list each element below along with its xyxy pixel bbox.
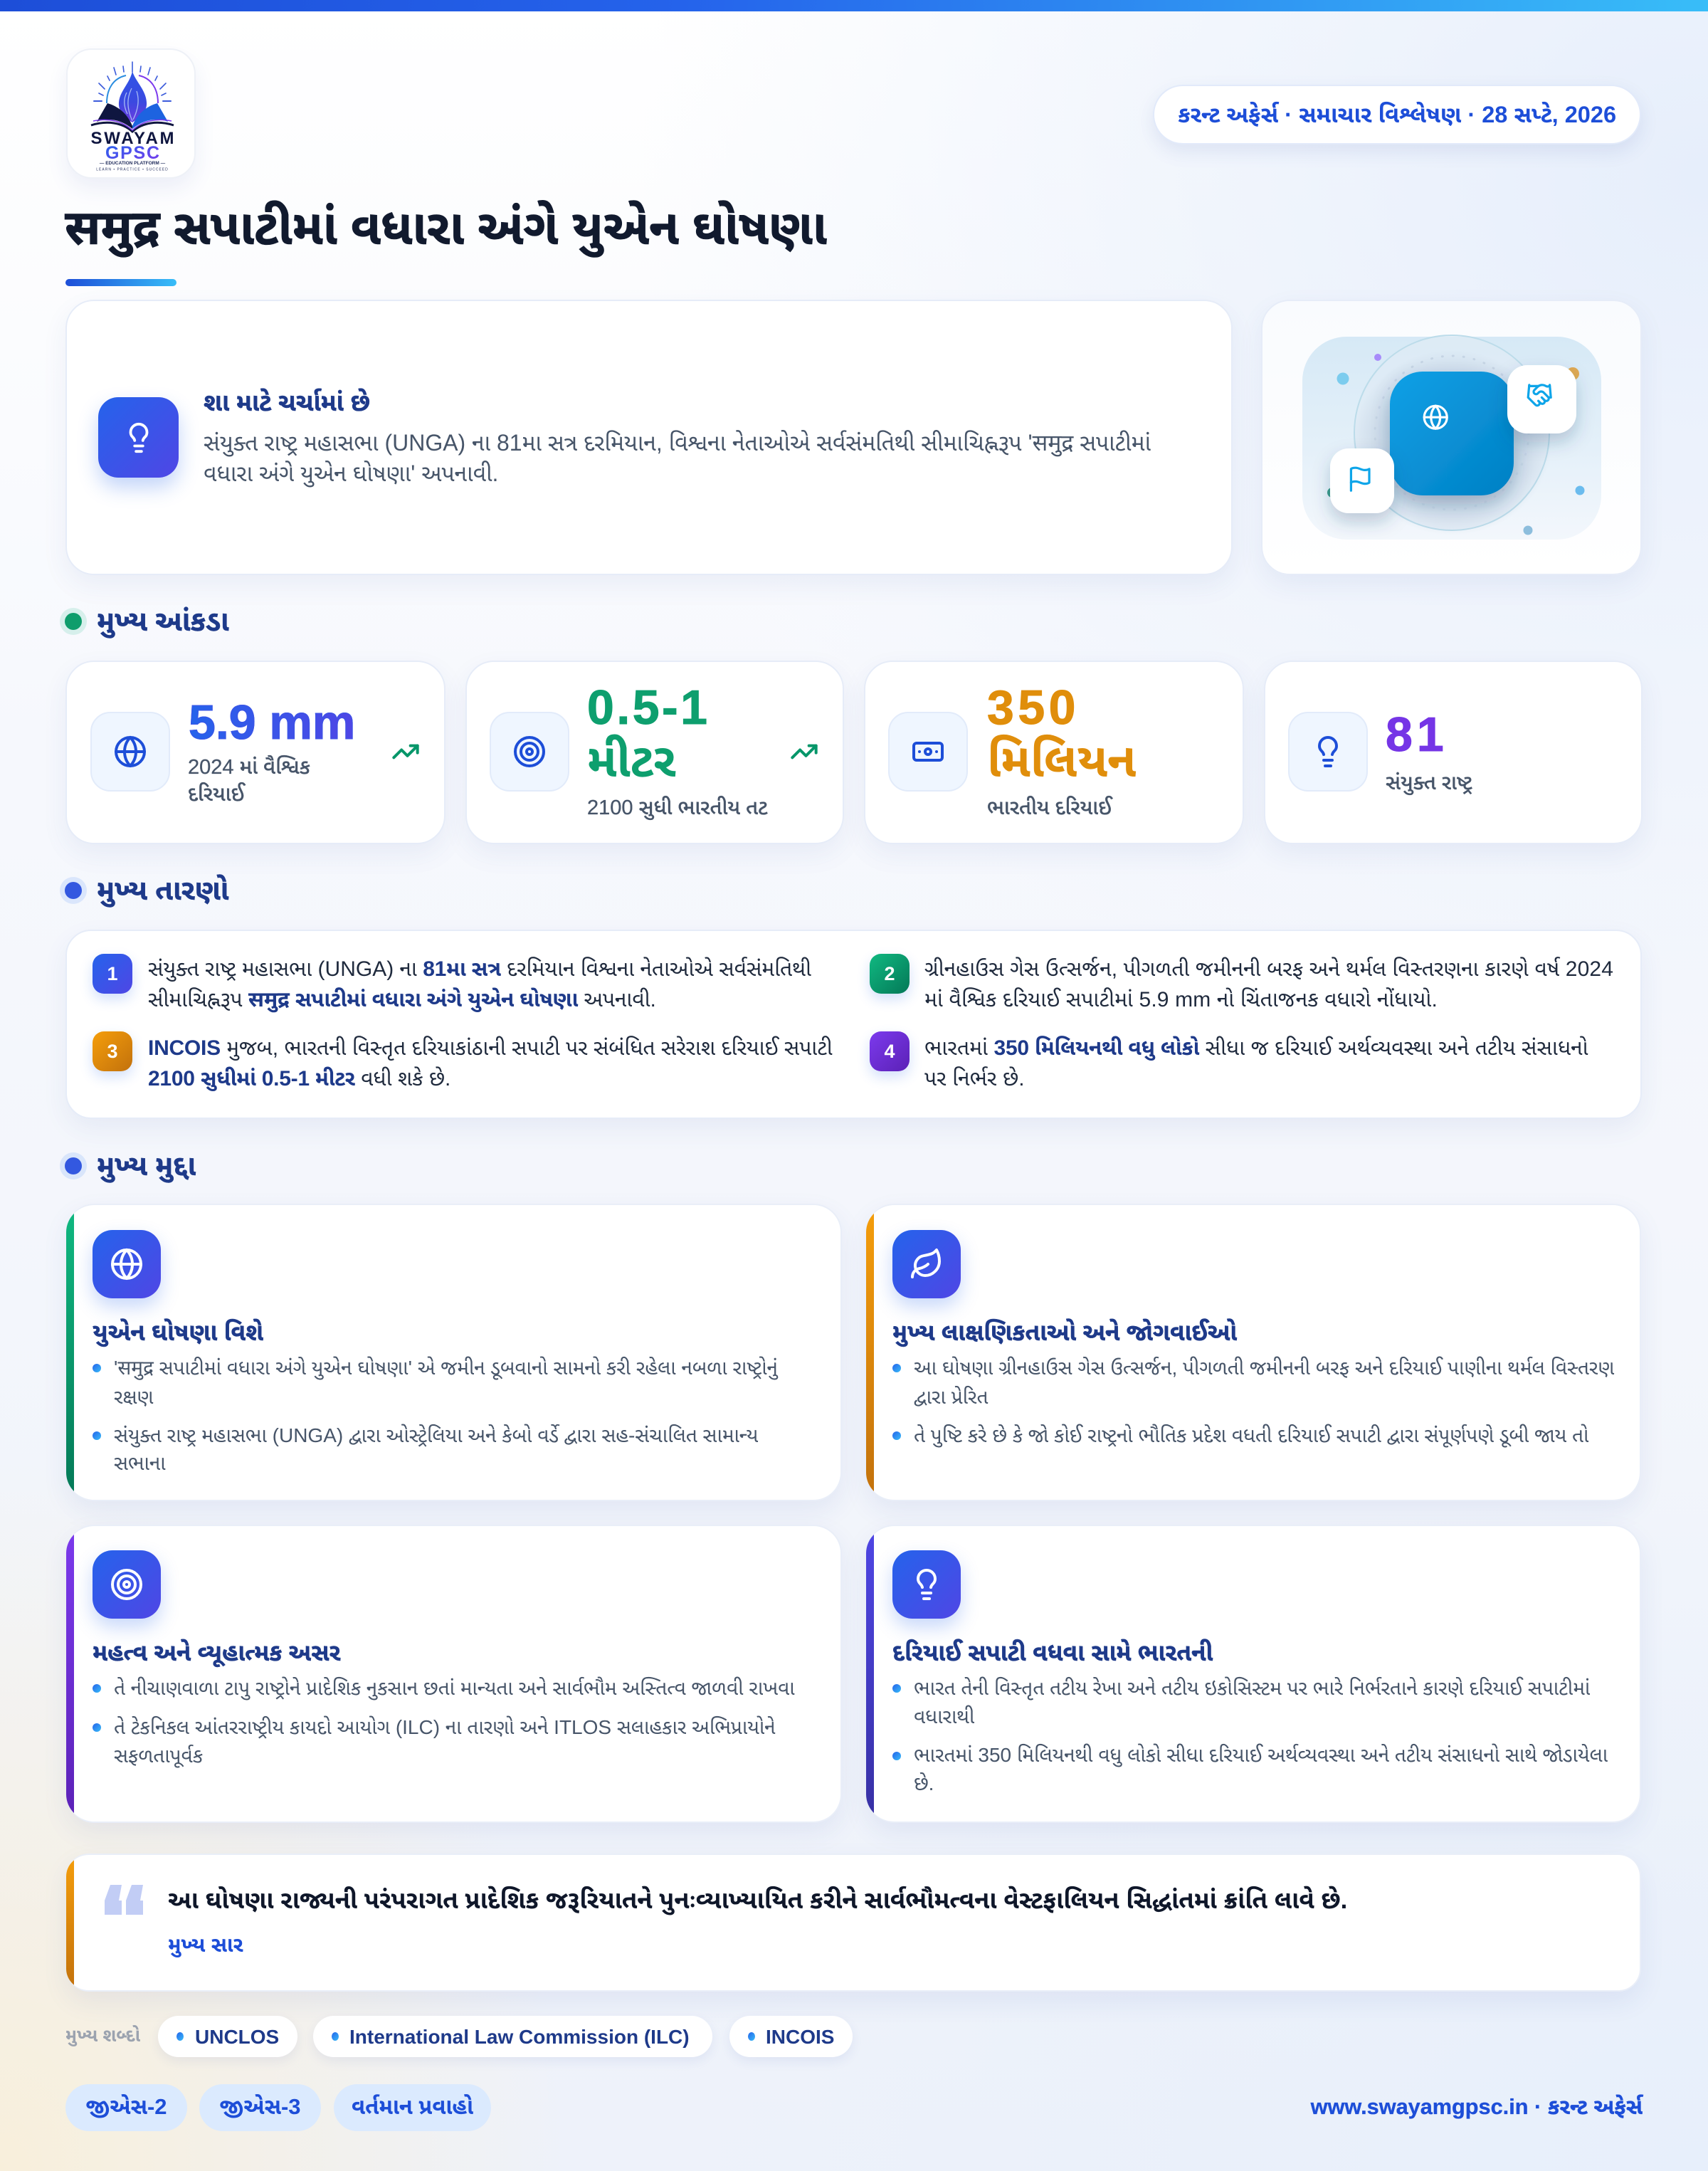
finding 4: 4 bbox=[884, 1041, 895, 1062]
quote source: મુખ્ય સાર bbox=[168, 1933, 243, 1957]
icon: leaf bbox=[892, 1230, 961, 1298]
flag tile bbox=[1330, 448, 1394, 513]
stat 2 icon: target bbox=[490, 712, 569, 792]
finding 4: ભારતમાં 350 મિલિયનથી વધુ લોકો સીધા જ દરિયાઈ અર્થવ્યવસ્થા અને તટીય સંસાધનો bbox=[924, 1036, 1588, 1060]
bullets: ભારત તેની વિસ્તૃત તટીય રેખા અને તટીય ઇકોસિસ્ટમ પર ભારે નિર્ભરતાને કારણે દરિયાઈ સપાટીમાં bbox=[914, 1677, 1590, 1699]
finding 4: પર નિર્ભર છે. bbox=[924, 1067, 1025, 1090]
finding 2: ગ્રીનહાઉસ ગેસ ઉત્સર્જન, પીગળતી જમીનની બરફ અને થર્મલ વિસ્તરણના કારણે વર્ષ 2024 bbox=[924, 957, 1613, 981]
stat 4 label: સંયુક્ત રાષ્ટ્ર bbox=[1386, 772, 1472, 794]
section heading: key stats: મુખ્ય આંકડા bbox=[97, 606, 229, 637]
stat 2 label: 2100 સુધી ભારતીય તટ bbox=[587, 797, 768, 819]
finding 3 bbox=[87, 1031, 833, 1091]
bullets: તે નીચાણવાળા ટાપુ રાષ્ટ્રોને પ્રાદેશિક નુકસાન છતાં માન્યતા અને સાર્વભૌમ અસ્તિત્વ જાળવી રાખવા bbox=[114, 1677, 795, 1699]
logo: Swayam GPSC: — EDUCATION PLATFORM — bbox=[100, 161, 166, 166]
stat 2 value: 0.5-1 bbox=[587, 680, 710, 735]
finding 4 bbox=[864, 1031, 1588, 1090]
why in news text: વધારા અંગે યુએન ઘોષણા' અપનાવી. bbox=[204, 461, 498, 486]
card title: મુખ્ય લાક્ષણિકતાઓ અને જોગવાઈઓ bbox=[892, 1320, 1237, 1346]
bullets: તે પુષ્ટિ કરે છે કે જો કોઈ રાષ્ટ્રનો ભૌતિક પ્રદેશ વધતી દરિયાઈ સપાટી દ્વારા સંપૂર્ણપણે ડૂબી જાય તો bbox=[914, 1424, 1588, 1446]
quote text: આ ઘોષણા રાજ્યની પરંપરાગત પ્રાદેશિક જરૂરિયાતને પુનઃવ્યાખ્યાયિત કરીને સાર્વભૌમત્વના વેસ્ટફાલિયન સિદ્ધાંતમાં ક્રાંતિ લાવે છે. bbox=[168, 1886, 1347, 1914]
why in news heading: શા માટે ચર્ચામાં છે bbox=[204, 389, 370, 416]
bullets: છે. bbox=[914, 1772, 934, 1794]
stat card 3 bbox=[864, 661, 1244, 844]
bullets: સંયુક્ત રાષ્ટ્ર મહાસભા (UNGA) દ્વારા ઓસ્ટ્રેલિયા અને કેબો વર્ડે દ્વારા સહ-સંચાલિત સામાન્ય bbox=[114, 1424, 758, 1446]
finding 1: સંયુક્ત રાષ્ટ્ર મહાસભા (UNGA) ના 81મા સત્ર દરમિયાન વિશ્વના નેતાઓએ સર્વસંમતિથી bbox=[148, 957, 811, 981]
stat card 2 bbox=[465, 661, 844, 844]
logo wordmark: SWAYAM bbox=[91, 129, 174, 148]
icon: lightbulb bbox=[98, 397, 179, 478]
keyword: INCOIS: INCOIS bbox=[766, 2026, 834, 2048]
finding 2: માં વૈશ્વિક દરિયાઈ સપાટીમાં 5.9 mm નો ચિંતાજનક વધારો નોંધાયો. bbox=[924, 988, 1438, 1011]
card title: યુએન ઘોષણા વિશે bbox=[93, 1320, 263, 1346]
bullets bbox=[93, 1677, 795, 1768]
bullets: સફળતાપૂર્વક bbox=[114, 1745, 203, 1767]
finding 3: 3 bbox=[107, 1041, 118, 1062]
stat card 4 bbox=[1264, 661, 1643, 844]
bullets bbox=[93, 1357, 779, 1474]
illustration backdrop bbox=[1302, 337, 1601, 540]
floating dots bbox=[1327, 354, 1584, 535]
keyword: INCOIS bbox=[729, 2016, 853, 2057]
icon: target bbox=[93, 1550, 161, 1619]
panel: key findings bbox=[65, 930, 1642, 1119]
tag: current affairs: વર્તમાન પ્રવાહો bbox=[352, 2094, 473, 2119]
finding 1 bbox=[87, 954, 811, 1012]
why in news text bbox=[204, 430, 1151, 487]
icon: quote mark bbox=[105, 1885, 143, 1915]
finding 3: INCOIS મુજબ, ભારતની વિસ્તૃત દરિયાકાંઠાની સપાટી પર સંબંધિત સરેરાશ દરિયાઈ સપાટી bbox=[148, 1036, 833, 1060]
stat 4 value: 81 bbox=[1386, 708, 1448, 762]
tag: GS-3 bbox=[199, 2084, 321, 2131]
keyword: ILC: International Law Commission (ILC) bbox=[349, 2026, 690, 2048]
stat 2 trend arrow bbox=[791, 745, 818, 759]
keywords label: મુખ્ય શબ્દો bbox=[65, 2026, 140, 2046]
why in news text: સંયુક્ત રાષ્ટ્ર મહાસભા (UNGA) ના 81મા સત્ર દરમિયાન, વિશ્વના નેતાઓએ સર્વસંમતિથી સીમાચિહ્નરૂપ 'समुद्र સપાટીમાં bbox=[204, 430, 1151, 456]
bullets bbox=[892, 1677, 1608, 1794]
stat 2 value bbox=[587, 680, 710, 787]
bullets: વધારાથી bbox=[914, 1705, 974, 1728]
date pill: કરન્ટ અફેર્સ · સમાચાર વિશ્લેષણ · 28 સપ્ટે, 2026 bbox=[1178, 102, 1616, 127]
panel: main features and provisions bbox=[866, 1204, 1641, 1501]
panel: about the UN declaration bbox=[66, 1204, 842, 1501]
section heading: key points: મુખ્ય મુદ્દા bbox=[97, 1150, 196, 1182]
panel: illustration bbox=[1261, 300, 1642, 575]
bullets: તે ટેકનિકલ આંતરરાષ્ટ્રીય કાયદો આયોગ (ILC) ના તારણો અને ITLOS સલાહકાર અભિપ્રાયોને bbox=[114, 1716, 776, 1738]
finding 3: 2100 સુધીમાં 0.5-1 મીટર વધી શકે છે. bbox=[148, 1067, 450, 1090]
card title: મહત્વ અને વ્યૂહાત્મક અસર bbox=[93, 1640, 340, 1666]
panel: India against sea level rise bbox=[866, 1525, 1641, 1823]
stat 2 value: મીટર bbox=[587, 734, 675, 787]
bullets: 'समुद्र સપાટીમાં વધારા અંગે યુએન ઘોષણા' એ જમીન ડૂબવાનો સામનો કરી રહેલા નબળા રાષ્ટ્રોનું bbox=[114, 1357, 778, 1379]
icon: lightbulb bbox=[892, 1550, 961, 1619]
finding 1: સીમાચિહ્નરૂપ समुद्र સપાટીમાં વધારા અંગે યુએન ઘોષણા અપનાવી. bbox=[148, 988, 656, 1011]
stat 1 label: દરિયાઈ bbox=[188, 783, 244, 806]
top gradient bar bbox=[0, 0, 1708, 11]
section heading: key findings: મુખ્ય તારણો bbox=[97, 875, 228, 906]
stat 3 value: 350 bbox=[987, 680, 1080, 735]
bullets: સભાના bbox=[114, 1452, 166, 1474]
tag: current affairs bbox=[334, 2084, 491, 2131]
card title: દરિયાઈ સપાટી વધવા સામે ભારતની bbox=[892, 1640, 1213, 1666]
bullets bbox=[892, 1357, 1614, 1448]
keyword: ILC bbox=[313, 2016, 712, 2057]
title underline bbox=[65, 279, 176, 286]
stat 3 icon: banknote bbox=[888, 712, 968, 792]
stat 1 value: 5.9 mm bbox=[189, 695, 355, 750]
stat 4 icon: lightbulb bbox=[1288, 712, 1368, 792]
central blue tile with globe bbox=[1390, 372, 1514, 495]
tag: GS-2 bbox=[65, 2084, 187, 2131]
tag: GS-3: જીએસ-3 bbox=[219, 2094, 301, 2119]
stat 3 value bbox=[987, 680, 1136, 787]
logo: Swayam GPSC: GPSC bbox=[105, 143, 159, 163]
finding 2 bbox=[864, 954, 1613, 1011]
tag: GS-2: જીએસ-2 bbox=[85, 2094, 167, 2119]
finding 2: 2 bbox=[884, 963, 895, 984]
bullets: આ ઘોષણા ગ્રીનહાઉસ ગેસ ઉત્સર્જન, પીગળતી જમીનની બરફ અને દરિયાઈ પાણીના થર્મલ વિસ્તરણ bbox=[914, 1357, 1614, 1379]
panel: significance and strategic impact bbox=[66, 1525, 842, 1823]
stat 1 label bbox=[188, 755, 310, 806]
bullets: રક્ષણ bbox=[114, 1386, 154, 1408]
stat card 1 bbox=[65, 661, 446, 844]
keyword: UNCLOS: UNCLOS bbox=[195, 2026, 279, 2048]
bullets: ભારતમાં 350 મિલિયનથી વધુ લોકો સીધા દરિયાઈ અર્થવ્યવસ્થા અને તટીય સંસાધનો સાથે જોડાયેલા bbox=[914, 1744, 1608, 1766]
footer site text: www.swayamgpsc.in · કરન્ટ અફેર્સ bbox=[1311, 2094, 1643, 2119]
stat 3 value: મિલિયન bbox=[987, 734, 1136, 787]
logo: Swayam GPSC bbox=[66, 48, 196, 179]
keyword: UNCLOS bbox=[158, 2016, 297, 2057]
panel: key quote bbox=[66, 1854, 1641, 1992]
date pill bbox=[1153, 85, 1641, 144]
icon: globe bbox=[93, 1230, 161, 1298]
finding 1: 1 bbox=[107, 963, 118, 984]
title: समुद्र સપાટીમાં વધારા અંગે યુએન ઘોષણા bbox=[65, 200, 827, 255]
bullets: દ્વારા પ્રેરિત bbox=[914, 1386, 988, 1408]
stat 1 label: 2024 માં વૈશ્વિક bbox=[188, 756, 310, 779]
panel: why in news bbox=[65, 300, 1233, 575]
section heading: key points bbox=[60, 1150, 196, 1183]
handshake tile bbox=[1507, 365, 1576, 433]
stat 1 icon: globe bbox=[90, 712, 170, 792]
stat 1 trend arrow bbox=[392, 745, 419, 759]
stat 3 label: ભારતીય દરિયાઈ bbox=[987, 797, 1112, 819]
logo: Swayam GPSC: LEARN • PRACTICE • SUCCEED bbox=[96, 168, 169, 172]
